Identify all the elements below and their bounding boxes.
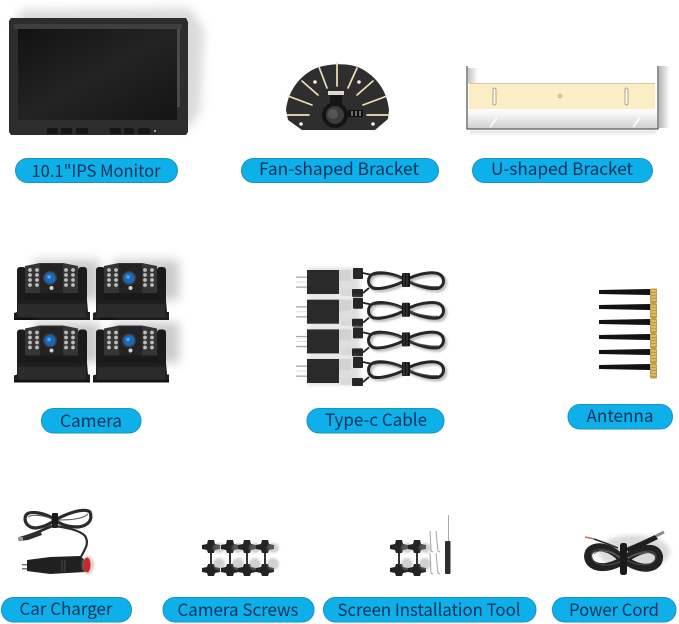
cable set 3: [296, 327, 446, 356]
camera 3: [14, 322, 100, 382]
label: Screen Installation Tool: Screen Installation Tool: [338, 596, 521, 621]
car charger: [18, 510, 94, 574]
bare wires: [594, 539, 618, 548]
fan-shaped bracket: [286, 63, 389, 130]
monitor: [9, 8, 204, 135]
label: Antenna: Antenna: [586, 402, 654, 427]
antenna 5: [599, 348, 657, 364]
antennas: [599, 288, 657, 378]
label: Fan-shaped Bracket: Fan-shaped Bracket: [259, 155, 420, 180]
bracket shading: [468, 109, 657, 129]
monitor buttons: [47, 128, 156, 134]
monitor screen: [18, 29, 177, 120]
label: Camera: [42, 407, 141, 433]
antenna 1: [599, 288, 657, 304]
u-shaped bracket: [467, 66, 670, 134]
antenna 4: [599, 334, 657, 348]
bracket outline: [467, 66, 658, 129]
bracket slots: [287, 63, 389, 115]
screen installation tools: [390, 515, 450, 576]
label: Type-c Cable: [307, 406, 444, 433]
label: 10.1"IPS Monitor: 10.1"IPS Monitor: [32, 157, 161, 182]
label: Camera: Camera: [60, 407, 122, 432]
antenna 6: [599, 364, 657, 378]
cord shadow: [598, 535, 670, 569]
hex keys: [430, 531, 440, 574]
antenna 3: [599, 318, 657, 334]
cable set 1: [296, 268, 446, 297]
label: Power Cord: Power Cord: [569, 596, 659, 621]
camera 2: [93, 260, 179, 320]
type-c cables: [296, 268, 446, 386]
label: Camera Screws: Camera Screws: [178, 596, 299, 621]
cable set 2: [296, 298, 446, 327]
bracket slots: [493, 88, 628, 105]
ball mount: [322, 91, 363, 128]
bottom row: [202, 558, 279, 576]
power cord: [585, 532, 670, 575]
dc plug: [19, 530, 42, 541]
cord plug: [626, 535, 658, 552]
cigarette plug body: [27, 556, 85, 574]
bracket holes: [299, 80, 375, 126]
monitor body: [9, 18, 188, 135]
red switch: [82, 556, 94, 574]
tool screws: [390, 540, 431, 576]
top row: [202, 540, 279, 562]
label: Car Charger: [2, 595, 132, 622]
bracket highlights: [490, 118, 640, 127]
camera 1: [14, 260, 100, 320]
monitor shadow: [14, 8, 204, 130]
label: Type-c Cable: Type-c Cable: [325, 406, 427, 431]
camera group: [14, 260, 179, 382]
bracket plate: [286, 64, 389, 130]
camera 4: [93, 322, 179, 382]
charger cable loop: [25, 510, 91, 528]
bracket plate: [469, 83, 655, 109]
cable set 4: [296, 357, 446, 386]
label: U-shaped Bracket: U-shaped Bracket: [491, 155, 634, 180]
antenna 2: [599, 304, 657, 318]
camera screws: [202, 540, 279, 576]
cord coil: [588, 543, 659, 575]
screwdriver: [445, 515, 450, 574]
label: Car Charger: Car Charger: [20, 595, 113, 620]
label: Antenna: [568, 402, 672, 429]
